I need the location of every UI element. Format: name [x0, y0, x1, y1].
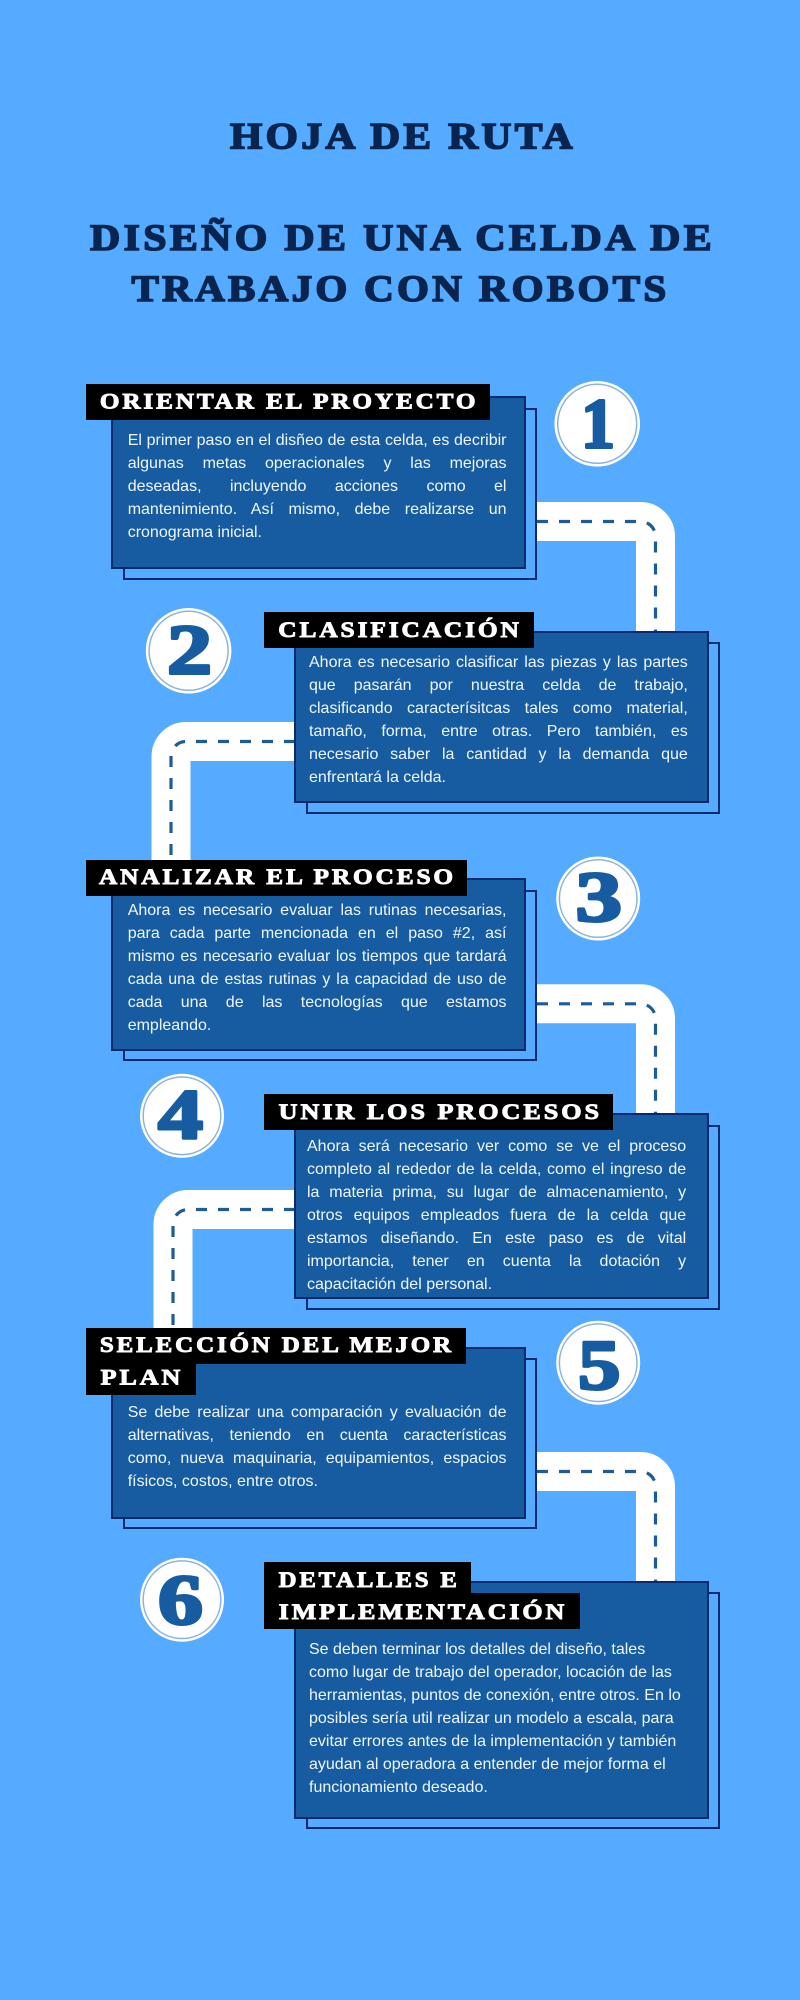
title line: diseño de una celda de: DISEÑO DE UNA CELDA DE: [90, 217, 715, 259]
icon: number 2: 2: [167, 612, 212, 690]
text: step 1 description: deseadas, incluyendo acciones como el: [128, 478, 506, 495]
text: step 4 description: [307, 1138, 686, 1292]
heading: orientar el proyecto: ORIENTAR EL PROYECTO: [99, 389, 478, 414]
text: step 3 description: empleando.: [128, 1017, 211, 1034]
text: step 6 description: ayudan al operadora a entender de mejor forma el: [309, 1756, 666, 1773]
heading: unir los procesos: [264, 1094, 613, 1130]
text: step 5 description: alternativas, teniendo en cuenta características: [128, 1427, 506, 1444]
text: step 6 description: como lugar de trabajo del operador, locación de las: [309, 1664, 672, 1681]
text: step 4 description: la materia prima, su lugar de almacenamiento, y: [307, 1184, 686, 1200]
panel: step 6 detalles e implementación: [264, 1562, 720, 1829]
text: step 2 description: clasificando caracterísitcas tales como material,: [309, 700, 688, 717]
panel: step 3 analizar el proceso: [86, 860, 537, 1061]
road: step 5 to step 6: [537, 1452, 675, 1581]
text: step 3 description: [128, 902, 507, 1034]
road: step 3 to step 4: [537, 984, 675, 1113]
panel: step 1 orientar el proyecto: [86, 384, 537, 580]
icon: number 5: [556, 1320, 640, 1405]
panel: step 5 selección del mejor plan: [86, 1328, 537, 1529]
text: step 5 description: Se debe realizar una comparación y evaluación de: [128, 1404, 506, 1421]
text: step 4 description: completo al rededor de la celda, como el ingreso de: [307, 1160, 686, 1178]
text: step 2 description: enfrentará la celda.: [309, 769, 446, 786]
text: step 3 description: cada una de las tecnologías que estamos: [128, 994, 506, 1011]
icon: number 5: 5: [578, 1327, 620, 1405]
panel: step 2 clasificación: [264, 612, 720, 814]
text: step 4 description: importancia, tener en cuenta la dotación y: [307, 1252, 686, 1270]
text: step 4 description: capacitación del personal.: [307, 1276, 492, 1292]
text: step 5 description: [128, 1404, 506, 1490]
text: step 2 description: tamaño, forma, entre otras. Pero también, es: [309, 723, 688, 740]
text: step 6 description: [309, 1641, 681, 1796]
text: step 2 description: Ahora es necesario clasificar las piezas y las partes: [309, 654, 688, 671]
text: step 6 description: posibles sería util realizar un modelo a escala, para: [309, 1710, 674, 1727]
text: step 2 description: que pasarán por nuestra celda de trabajo,: [309, 677, 688, 694]
heading: unir los procesos: UNIR LOS PROCESOS: [279, 1099, 602, 1124]
heading: orientar el proyecto: [86, 384, 490, 420]
heading: detalles e: DETALLES E: [279, 1567, 460, 1592]
icon: number 1: [554, 381, 640, 467]
heading: analizar el proceso: ANALIZAR EL PROCESO: [99, 864, 456, 889]
panel: step 4 unir los procesos: [264, 1094, 720, 1310]
heading: selección del mejor: [86, 1328, 466, 1364]
text: step 4 description: otros equipos empleados fuera de la celda que: [307, 1206, 686, 1224]
road: step 1 to step 2: [537, 502, 675, 631]
title line: trabajo con robots: TRABAJO CON ROBOTS: [132, 269, 670, 310]
text: step 6 description: evitar errores antes de la implementación y también: [309, 1733, 676, 1750]
text: step 1 description: algunas metas operacionales y las mejoras: [128, 455, 506, 472]
road: step 2 to step 3: [152, 722, 294, 860]
icon: number 6: [140, 1558, 224, 1642]
title: [90, 116, 715, 310]
text: step 3 description: cada una de estas rutinas y la capacidad de uso de: [128, 971, 506, 988]
text: step 3 description: Ahora es necesario evaluar las rutinas necesarias,: [128, 902, 506, 919]
heading: clasificación: [264, 612, 534, 648]
text: step 4 description: estamos diseñando. En este paso es de vital: [307, 1230, 686, 1246]
heading: clasificación: CLASIFICACIÓN: [279, 617, 522, 642]
icon: number 3: 3: [576, 859, 622, 937]
text: step 5 description: como, nueva maquinaria, equipamientos, espacios: [128, 1450, 506, 1467]
icon: number 4: 4: [158, 1076, 203, 1154]
icon: number 2: [146, 608, 232, 694]
heading: selección del mejor: SELECCIÓN DEL MEJOR: [99, 1332, 453, 1357]
title line: hoja de ruta: HOJA DE RUTA: [230, 116, 576, 158]
text: step 3 description: para cada parte mencionada en el paso #2, así: [128, 925, 506, 942]
icon: number 3: [556, 856, 640, 940]
text: step 6 description: herramientas, puntos de conexión, entre otros. En lo: [309, 1687, 681, 1704]
icon: number 1: 1: [581, 386, 615, 464]
text: step 6 description: Se deben terminar los detalles del diseño, tales: [309, 1641, 645, 1658]
text: step 6 description: funcionamiento deseado.: [309, 1779, 488, 1796]
text: step 1 description: mantenimiento. Así mismo, debe realizarse un: [128, 501, 506, 518]
text: step 5 description: físicos, costos, entre otros.: [128, 1473, 318, 1490]
icon: number 6: 6: [158, 1562, 203, 1640]
heading: plan: [86, 1363, 196, 1395]
text: step 1 description: [128, 432, 506, 541]
text: step 1 description: El primer paso en el disñeo de esta celda, es decribir: [128, 432, 506, 449]
heading: implementación: IMPLEMENTACIÓN: [279, 1599, 567, 1624]
text: step 4 description: Ahora será necesario ver como se ve el proceso: [307, 1138, 686, 1154]
text: step 2 description: necesario saber la cantidad y la demanda que: [309, 746, 688, 763]
heading: plan: PLAN: [100, 1364, 183, 1389]
road: step 4 to step 5: [154, 1190, 294, 1328]
heading: detalles e: [264, 1562, 471, 1594]
text: step 1 description: cronograma inicial.: [128, 524, 262, 541]
icon: number 4: [140, 1074, 224, 1158]
heading: analizar el proceso: [86, 860, 467, 896]
heading: implementación: [264, 1593, 580, 1629]
text: step 3 description: mismo es necesario evaluar los tiempos que tardará: [128, 948, 506, 965]
text: step 2 description: [309, 654, 688, 786]
